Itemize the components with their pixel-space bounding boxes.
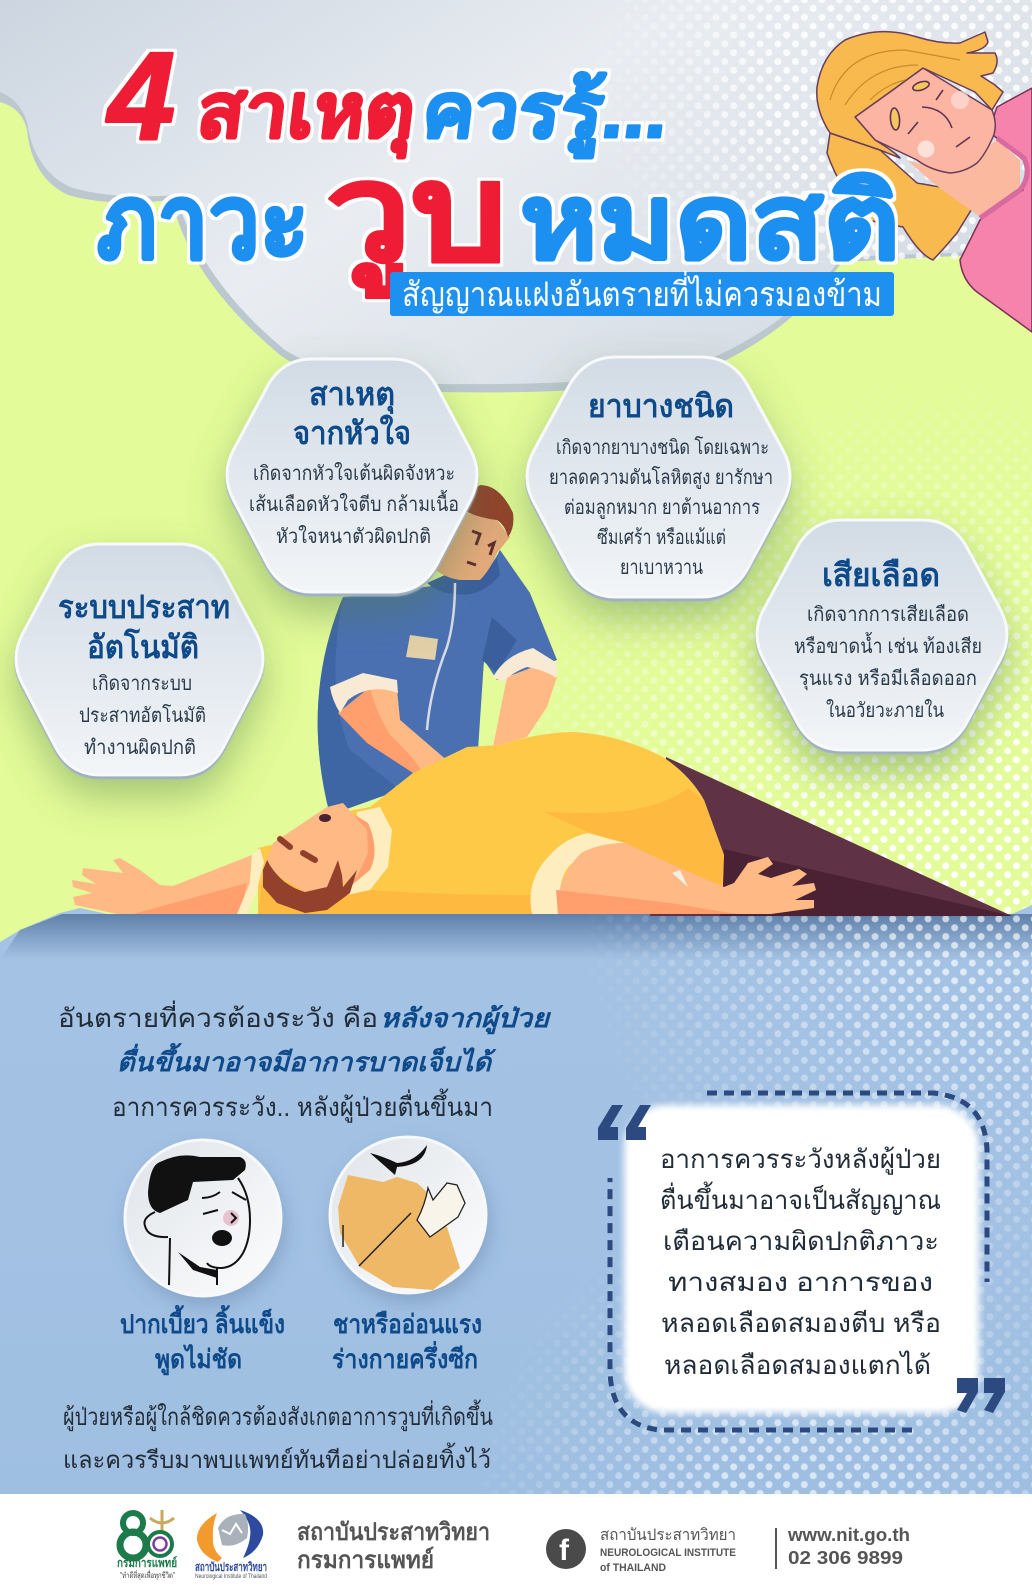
phone: 02 306 9899	[788, 1548, 903, 1568]
heading: เสียเลือด	[822, 557, 940, 593]
head	[433, 513, 510, 580]
heading: ระบบประสาท	[58, 589, 230, 625]
quote box: หลอดเลือดสมองแตกได้	[664, 1350, 931, 1380]
face	[855, 68, 995, 173]
jaw shadow	[178, 1252, 217, 1278]
hexagon	[227, 359, 477, 592]
beard	[263, 860, 357, 913]
logo: neurological institute: สถาบันประสาทวิทยา	[195, 1560, 267, 1574]
halftone dots: top right	[662, 0, 1032, 262]
sleeve	[544, 788, 724, 887]
halftone dots: lower right	[608, 915, 1032, 1284]
name badge	[406, 635, 438, 660]
footer: of THAILAND	[600, 1562, 666, 1574]
neck lines	[169, 1238, 217, 1285]
face outline	[207, 1178, 250, 1268]
word: should know: ควรรู้...	[417, 69, 673, 159]
legs	[650, 757, 1012, 916]
symptom labels: ปากเบี้ยว ลิ้นแข็ง	[120, 1304, 285, 1339]
advice text	[63, 1399, 493, 1474]
left arm and hand	[72, 855, 252, 914]
shirt	[960, 88, 1032, 332]
body: เกิดจากระบบ	[92, 673, 192, 695]
heading: ยาบางชนิด	[588, 388, 734, 424]
header cloud shadow	[0, 0, 1032, 392]
icon: opening quote mark	[598, 1105, 651, 1140]
left arm shade	[133, 883, 247, 914]
organisation name: สถาบันประสาทวิทยา	[297, 1519, 490, 1546]
symptom labels	[120, 1304, 482, 1376]
head	[267, 803, 368, 892]
footer: NEUROLOGICAL INSTITUTE	[600, 1547, 736, 1559]
hexagon	[16, 544, 263, 775]
logo: 80 years department of medical services: กรมการแพทย์	[117, 1556, 177, 1570]
hair	[467, 485, 513, 537]
left cuff	[330, 673, 398, 713]
icon: closing quote mark	[957, 1378, 1005, 1413]
collar	[347, 807, 392, 895]
jacket	[318, 550, 557, 815]
collar	[427, 558, 500, 595]
advice text: และควรรีบมาพบแพทย์ทันทีอย่าปล่อยทิ้งไว้	[63, 1442, 491, 1474]
elbow mark	[672, 870, 688, 887]
warning text block: อันตรายที่ควรต้องระวัง คือ	[58, 1000, 378, 1033]
hand	[417, 1183, 465, 1237]
icon: arm weakness	[330, 1137, 486, 1293]
neck	[352, 815, 375, 885]
body: เกิดจากการเสียเลือด	[807, 604, 969, 626]
footer	[0, 1494, 1032, 1586]
right arm	[493, 667, 557, 747]
callout: blood loss: รุนแรง หรือมีเลือดออก	[799, 668, 977, 691]
neck	[907, 140, 1020, 217]
callout: autonomic nervous system: ทำงานผิดปกติ	[84, 737, 196, 759]
warning text block: หลังจากผู้ป่วย	[380, 1003, 552, 1035]
eyes	[280, 839, 315, 860]
blush	[918, 140, 934, 158]
nostril	[319, 814, 331, 822]
shirt fold	[343, 1213, 411, 1266]
logo: 80 years department of medical services	[117, 1510, 177, 1580]
jacket underarm shade	[482, 617, 517, 673]
logo: neurological institute	[195, 1510, 267, 1580]
warning text block: ตื่นขึ้นมาอาจมีอาการบาดเจ็บได้	[117, 1042, 497, 1077]
halftone dots: middle right	[528, 406, 1032, 914]
callout: blood loss: ในอวัยวะภายใน	[826, 699, 944, 722]
logo: 80 years department of medical services: "ทำดีที่สุดเพื่อทุกชีวิต"	[120, 1569, 175, 1580]
illustration: patient lying down	[72, 732, 1012, 916]
closed eyes and face marks	[890, 80, 970, 147]
box fill	[624, 1105, 979, 1413]
callout: blood loss: หรือขาดน้ำ เช่น ท้องเสีย	[794, 632, 982, 658]
quote box: หลอดเลือดสมองตีบ หรือ	[661, 1308, 941, 1338]
title	[97, 28, 900, 298]
shirt	[338, 1175, 460, 1290]
callout: autonomic nervous system: อัตโนมัติ	[87, 628, 199, 665]
lower shirt shade	[258, 880, 532, 914]
callout: certain drugs: ต่อมลูกหมาก ยาต้านอาการ	[564, 497, 760, 520]
illustration: woman fainting	[817, 32, 1032, 332]
collar	[980, 138, 1027, 218]
illustration: medic	[318, 485, 557, 815]
hexagon	[757, 520, 1007, 750]
callout: certain drugs	[527, 357, 790, 597]
hair strands	[830, 50, 960, 105]
neck	[370, 1145, 427, 1175]
warning text block: อาการควรระวัง.. หลังผู้ป่วยตื่นขึ้นมา	[112, 1088, 493, 1123]
mouth	[212, 1230, 232, 1246]
quote box: ตื่นขึ้นมาอาจเป็นสัญญาณ	[660, 1181, 941, 1215]
symptom labels: ร่างกายครึ่งซีก	[332, 1340, 478, 1374]
logo: neurological institute: Neurological Institute of Thailand	[195, 1574, 267, 1580]
dashed frame	[610, 1093, 987, 1430]
nose mark	[223, 1210, 239, 1226]
facebook page name: สถาบันประสาทวิทยา	[600, 1527, 736, 1544]
icon: facebook: f	[559, 1534, 570, 1567]
body shirt	[258, 732, 724, 914]
ear	[144, 1212, 168, 1237]
jacket left shade	[318, 597, 400, 815]
sleeve cuff	[530, 833, 625, 914]
callout: autonomic nervous system	[16, 544, 263, 775]
zipper	[427, 583, 455, 730]
right arm and hand	[558, 843, 816, 914]
word: unconscious: หมดสติ	[520, 165, 900, 281]
website: www.nit.go.th	[787, 1525, 910, 1545]
heading: สาเหตุ	[309, 376, 395, 415]
subtitle banner: สัญญาณแฝงอันตรายที่ไม่ควรมองข้าม	[402, 271, 882, 314]
hexagon	[527, 357, 790, 597]
halftone dots: bottom right	[510, 1274, 1032, 1494]
body: เกิดจากหัวใจเต้นผิดจังหวะ	[253, 462, 455, 485]
body: เกิดจากยาบางชนิด โดยเฉพาะ	[556, 436, 769, 459]
eyes and brow	[202, 1192, 246, 1223]
callout: certain drugs: ยาเบาหวาน	[620, 557, 703, 579]
quote box: เตือนความผิดปกติภาวะ	[663, 1226, 939, 1256]
quote box	[598, 1093, 1005, 1430]
icon: facebook	[546, 1529, 586, 1569]
callout: autonomic nervous system: ประสาทอัตโนมัติ	[79, 704, 206, 727]
callout: certain drugs: ซึมเศร้า หรือแม้แต่	[597, 527, 726, 549]
callout: heart causes: จากหัวใจ	[293, 414, 411, 451]
blue lower section	[0, 905, 1032, 1494]
word: condition: ภาวะ	[97, 165, 309, 281]
left arm	[338, 687, 467, 792]
upper hair	[817, 32, 1003, 158]
footer: กรมการแพทย์	[297, 1546, 434, 1574]
word: faint: วูบ	[326, 137, 507, 298]
word: causes: สาเหตุ	[192, 69, 420, 159]
callout: heart causes: หัวใจหนาตัวผิดปกติ	[276, 525, 431, 548]
warning text block	[58, 1000, 552, 1123]
symptom labels: พูดไม่ชัด	[155, 1343, 242, 1376]
callout: heart causes: เส้นเลือดหัวใจตีบ กล้ามเนื้อ	[249, 490, 459, 516]
icon: face with slurred speech	[125, 1140, 281, 1296]
right arm shade	[556, 890, 737, 914]
lower hair	[827, 133, 973, 260]
left cuff	[237, 848, 264, 914]
callout: certain drugs: ยาลดความดันโลหิตสูง ยารักษา	[549, 466, 773, 490]
header cloud	[0, 0, 1032, 384]
floor shadow	[0, 914, 1032, 960]
legs shade	[720, 849, 1012, 916]
quote text: อาการควรระวังหลังผู้ป่วย	[660, 1144, 941, 1175]
hair	[148, 1155, 246, 1213]
advice text: ผู้ป่วยหรือผู้ใกล้ชิดควรต้องสังเกตอาการวูบที่เกิดขึ้น	[63, 1399, 493, 1432]
number 4: 4	[105, 28, 175, 166]
quote box: ทางสมอง อาการของ	[668, 1267, 933, 1297]
right cuff	[493, 648, 557, 682]
callout: blood loss	[757, 520, 1007, 750]
callout: heart causes	[227, 359, 477, 592]
eyes and mouth	[467, 531, 494, 565]
symptom labels: ชาหรืออ่อนแรง	[333, 1309, 482, 1339]
divider	[775, 1528, 777, 1569]
